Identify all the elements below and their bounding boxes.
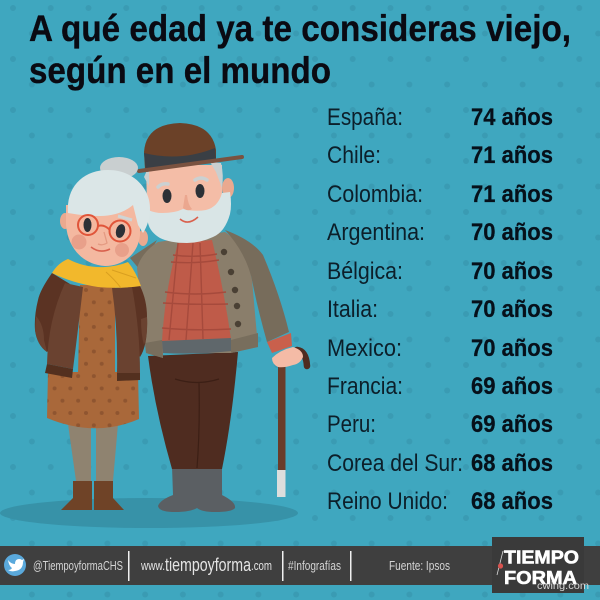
man beard: [148, 192, 231, 243]
title: [29, 8, 571, 91]
row: Reino Unido: [327, 488, 553, 515]
footer bar: [0, 546, 600, 585]
woman glasses: [78, 215, 130, 242]
woman nose: [98, 232, 107, 245]
row: Peru: 69 años: [471, 411, 553, 438]
row: España: [327, 104, 553, 131]
row: Colombia: [327, 181, 553, 208]
woman dress: [47, 285, 139, 428]
woman ear: [60, 213, 70, 229]
row: Bélgica: Bélgica:: [327, 258, 403, 285]
hashtag: #Infografías: [288, 558, 341, 573]
coat hems: [45, 364, 140, 381]
row: España: 74 años: [471, 104, 553, 131]
man mouth: [180, 217, 198, 222]
illustration: elderly woman: [35, 157, 150, 510]
row: Corea del Sur: 68 años: [471, 450, 553, 477]
woman face: [66, 205, 140, 266]
man face: [146, 165, 222, 234]
twitter handle: @TiempoyformaCHS: [33, 558, 123, 573]
man hand and cuff: [267, 333, 303, 367]
man nose: [183, 195, 192, 210]
woman hair: [68, 170, 150, 233]
row: Italia: Italia:: [327, 296, 378, 323]
man shoes: [158, 466, 235, 512]
ground shadow: [0, 498, 298, 528]
row: Peru: [327, 411, 553, 438]
title: según en el mundo: [29, 50, 331, 91]
row: Francia: 69 años: [471, 373, 553, 400]
illustration: elderly man: [130, 123, 307, 512]
man belt: [162, 338, 231, 354]
woman grey streak: [118, 216, 132, 220]
website: www.: [140, 558, 165, 573]
row: Reino Unido: Reino Unido:: [327, 488, 448, 515]
man plaid shirt: [162, 240, 231, 341]
row: España: España:: [327, 104, 403, 131]
row: Colombia: 71 años: [471, 181, 553, 208]
row: Mexico: Mexico:: [327, 335, 402, 362]
row: Francia: Francia:: [327, 373, 403, 400]
row: Argentina: 70 años: [471, 219, 553, 246]
man cane: [277, 350, 307, 497]
icon: twitter: [4, 554, 26, 576]
woman ear right: [138, 230, 148, 246]
row: Colombia: Colombia:: [327, 181, 423, 208]
row: Bélgica: 70 años: [471, 258, 553, 285]
man eyes: [162, 184, 204, 203]
source: Fuente: Ipsos: [389, 558, 450, 573]
coat sleeves: [35, 273, 147, 357]
man ear: [222, 178, 234, 198]
woman mouth: [91, 247, 110, 251]
man eyebrows: [158, 178, 207, 187]
row: Italia: 70 años: [471, 296, 553, 323]
row: Italia: [327, 296, 553, 323]
logo: Tiempo y Forma: TIEMPO: [504, 546, 579, 568]
man hat: [139, 123, 242, 172]
woman boots: [61, 481, 124, 510]
woman cheeks: [72, 234, 129, 257]
row: Bélgica: [327, 258, 553, 285]
row: Argentina: [327, 219, 553, 246]
website: .com: [251, 558, 272, 573]
row: Reino Unido: 68 años: [471, 488, 553, 515]
watermark: cwing.com: [537, 581, 589, 592]
woman coat: [35, 273, 147, 381]
row: Corea del Sur: [327, 450, 553, 477]
woman legs: [68, 424, 118, 481]
row: Chile: 71 años: [471, 142, 553, 169]
row: Mexico: 70 años: [471, 335, 553, 362]
website: tiempoyforma: [165, 555, 252, 575]
coat front panels: [47, 283, 140, 373]
logo: Tiempo y Forma: FORMA: [504, 567, 577, 588]
logo: Tiempo y Forma: [492, 537, 584, 593]
row: Peru: Peru:: [327, 411, 376, 438]
row: Chile: [327, 142, 553, 169]
man jacket buttons: [221, 249, 241, 327]
woman scarf: [52, 259, 141, 288]
country list: [327, 104, 553, 515]
woman eyes: [84, 218, 127, 239]
man jacket: [130, 230, 289, 358]
row: Corea del Sur: Corea del Sur:: [327, 450, 463, 477]
row: Chile: Chile:: [327, 142, 381, 169]
man side hair: [144, 162, 223, 188]
row: Francia: [327, 373, 553, 400]
man trousers: [148, 352, 238, 469]
coat elbow patches: [35, 316, 147, 352]
row: Argentina: Argentina:: [327, 219, 425, 246]
woman hair bun: [100, 157, 138, 179]
row: Mexico: [327, 335, 553, 362]
